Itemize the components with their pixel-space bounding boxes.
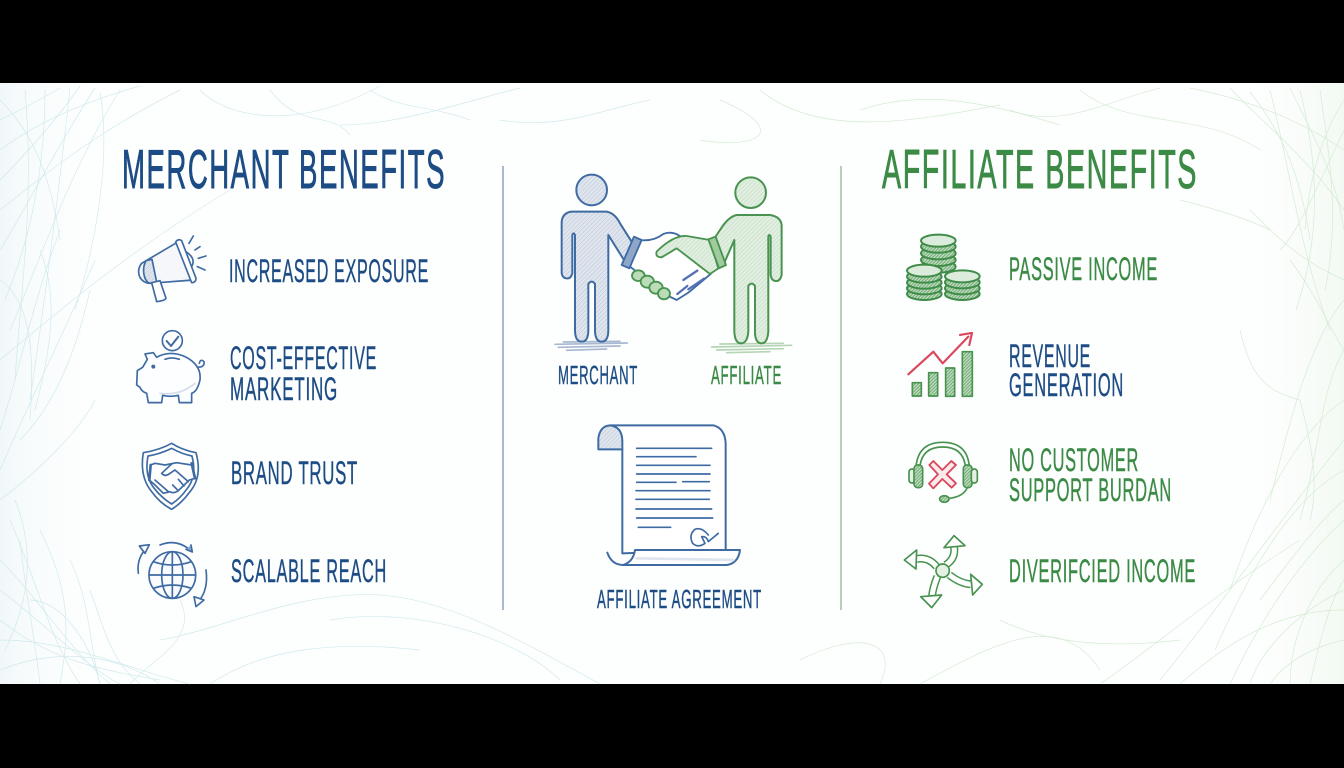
- figure: merchant: [555, 175, 633, 350]
- icon: coin stacks: [907, 235, 980, 300]
- label: brand trust: BRAND TRUST: [231, 455, 358, 491]
- divider right: [840, 166, 842, 610]
- label: no customer support burdan: NO CUSTOMER: [1009, 442, 1139, 478]
- label: no customer support burdan: SUPPORT BURDAN: [1009, 472, 1172, 508]
- label: increased exposure: INCREASED EXPOSURE: [229, 253, 429, 289]
- label: no customer support burdan: [1009, 442, 1172, 508]
- label: revenue generation: [1009, 338, 1124, 403]
- panel: merchant benefits: [137, 236, 429, 607]
- top black band: [0, 0, 1344, 83]
- label: revenue generation: REVENUE: [1009, 338, 1091, 374]
- icon: globe with arrows: [138, 543, 207, 607]
- icon: agreement scroll: [598, 425, 740, 565]
- icon: growth chart: [908, 333, 972, 396]
- icon: megaphone: [139, 236, 206, 302]
- label: passive income: PASSIVE INCOME: [1009, 251, 1158, 287]
- bottom black band: [0, 684, 1344, 768]
- cuff: merchant: [622, 237, 642, 268]
- label: affiliate agreement: AFFILIATE AGREEMENT: [597, 584, 762, 614]
- label: cost-effective marketing: COST-EFFECTIVE: [230, 340, 377, 376]
- hand: white merchant hand: [630, 233, 711, 300]
- panel: partnership centre: [555, 175, 792, 614]
- hand: green affiliate hand: [656, 236, 718, 274]
- illustration: handshake between merchant and affiliate: [555, 175, 792, 353]
- label: merchant: MERCHANT: [558, 360, 638, 390]
- fingers: green: [632, 270, 670, 299]
- label: scalable reach: SCALABLE REACH: [231, 553, 387, 589]
- label: affiliate: AFFILIATE: [711, 360, 782, 390]
- label: cost-effective marketing: MARKETING: [230, 371, 338, 407]
- icon: piggy bank: [137, 331, 204, 403]
- heading: merchant benefits: MERCHANT BENEFITS: [122, 138, 446, 200]
- divider left: [502, 166, 504, 610]
- icon: shield with handshake: [142, 443, 198, 509]
- icon: diverging arrows: [904, 536, 982, 608]
- background panel with pencil wisps: [0, 83, 1344, 684]
- panel: affiliate benefits: [904, 235, 1196, 608]
- figure: affiliate: [712, 177, 792, 353]
- icon: headset with cross: [909, 442, 977, 502]
- label: cost-effective marketing: [230, 340, 377, 407]
- cuff: affiliate: [708, 237, 726, 268]
- label: revenue generation: GENERATION: [1009, 367, 1124, 403]
